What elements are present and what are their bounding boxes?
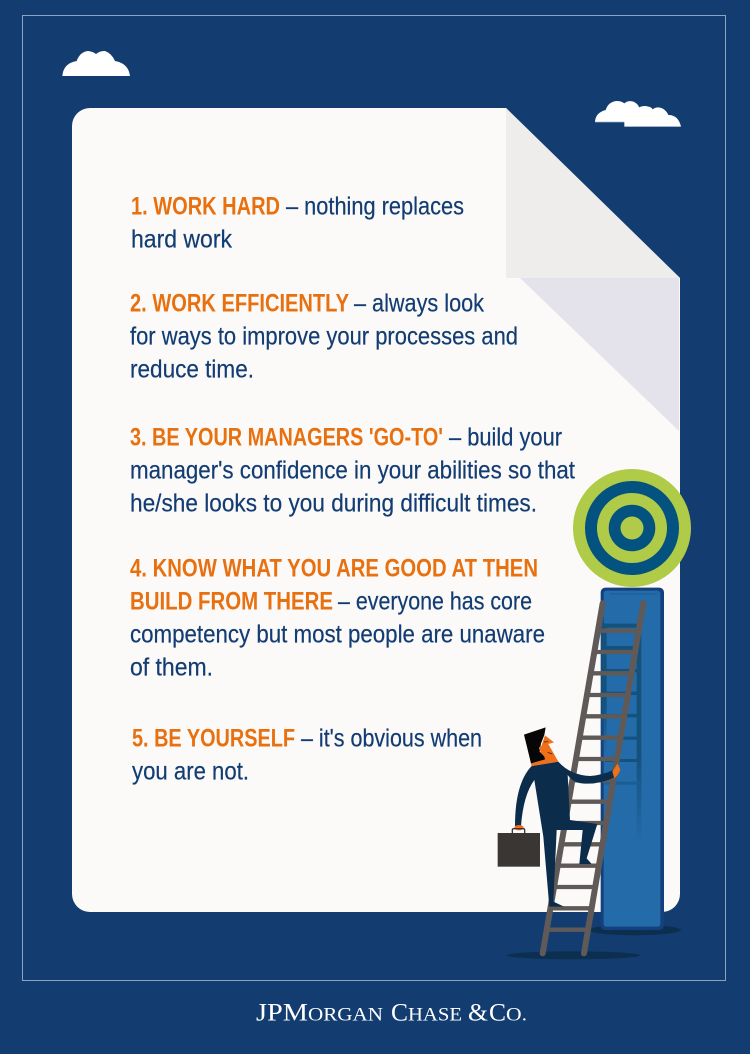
ground shadows xyxy=(507,925,681,959)
tip 5: you are not. xyxy=(132,758,249,786)
tip 5: 5. BE YOURSELF xyxy=(132,724,295,752)
tip 1: – nothing replaces xyxy=(286,192,464,220)
panel: paper sheet with folded corner xyxy=(72,108,680,912)
logo: JPMorgan Chase & Co.: C xyxy=(391,1000,408,1027)
logo: JPMorgan Chase & Co.: C xyxy=(489,1000,506,1027)
tip 2: – always look xyxy=(354,290,484,318)
hair xyxy=(524,727,546,763)
body xyxy=(515,762,614,907)
tip 5: – it's obvious when xyxy=(301,724,482,752)
tip 3 xyxy=(130,424,575,518)
icon: cloud right xyxy=(595,101,681,127)
ladder xyxy=(543,603,643,953)
tip 2: 2. WORK EFFICIENTLY xyxy=(130,290,349,318)
tip 4: competency but most people are unaware xyxy=(130,620,545,648)
tip 2: reduce time. xyxy=(130,356,254,384)
illustration: man climbing ladder to tall book xyxy=(507,588,681,959)
tip 3: he/she looks to you during difficult times. xyxy=(130,490,537,518)
right hand xyxy=(612,763,620,778)
logo: JPMorgan Chase & Co. xyxy=(256,1000,527,1027)
tip 4 xyxy=(130,554,545,682)
tall book xyxy=(601,588,664,930)
tip 2 xyxy=(130,290,518,384)
logo: JPMorgan Chase & Co.: O. xyxy=(506,1006,527,1026)
tip 1: 1. WORK HARD xyxy=(131,192,280,220)
tip 1 xyxy=(131,192,464,254)
tip 1: hard work xyxy=(131,226,232,254)
tip 5 xyxy=(132,724,482,786)
tip 4: BUILD FROM THERE xyxy=(130,588,333,616)
briefcase xyxy=(498,825,540,867)
logo: JPMorgan Chase & Co.: JPM xyxy=(256,1000,308,1027)
tip 4: of them. xyxy=(130,654,213,682)
icon: target xyxy=(573,469,691,587)
face xyxy=(531,735,558,766)
tip 4: 4. KNOW WHAT YOU ARE GOOD AT THEN xyxy=(130,554,538,582)
icon: cloud left xyxy=(62,51,130,76)
logo: JPMorgan Chase & Co.: ORGAN xyxy=(308,1006,383,1026)
tip 3: 3. BE YOUR MANAGERS 'GO-TO' xyxy=(130,424,443,452)
tip 3: manager's confidence in your abilities so that xyxy=(130,456,575,484)
man with briefcase xyxy=(498,727,620,907)
tip 2: for ways to improve your processes and xyxy=(130,322,518,350)
logo: JPMorgan Chase & Co.: HASE xyxy=(408,1006,462,1026)
tip 3: – build your xyxy=(449,424,562,452)
tip 4: – everyone has core xyxy=(338,588,532,616)
logo: JPMorgan Chase & Co.: & xyxy=(468,1000,488,1027)
